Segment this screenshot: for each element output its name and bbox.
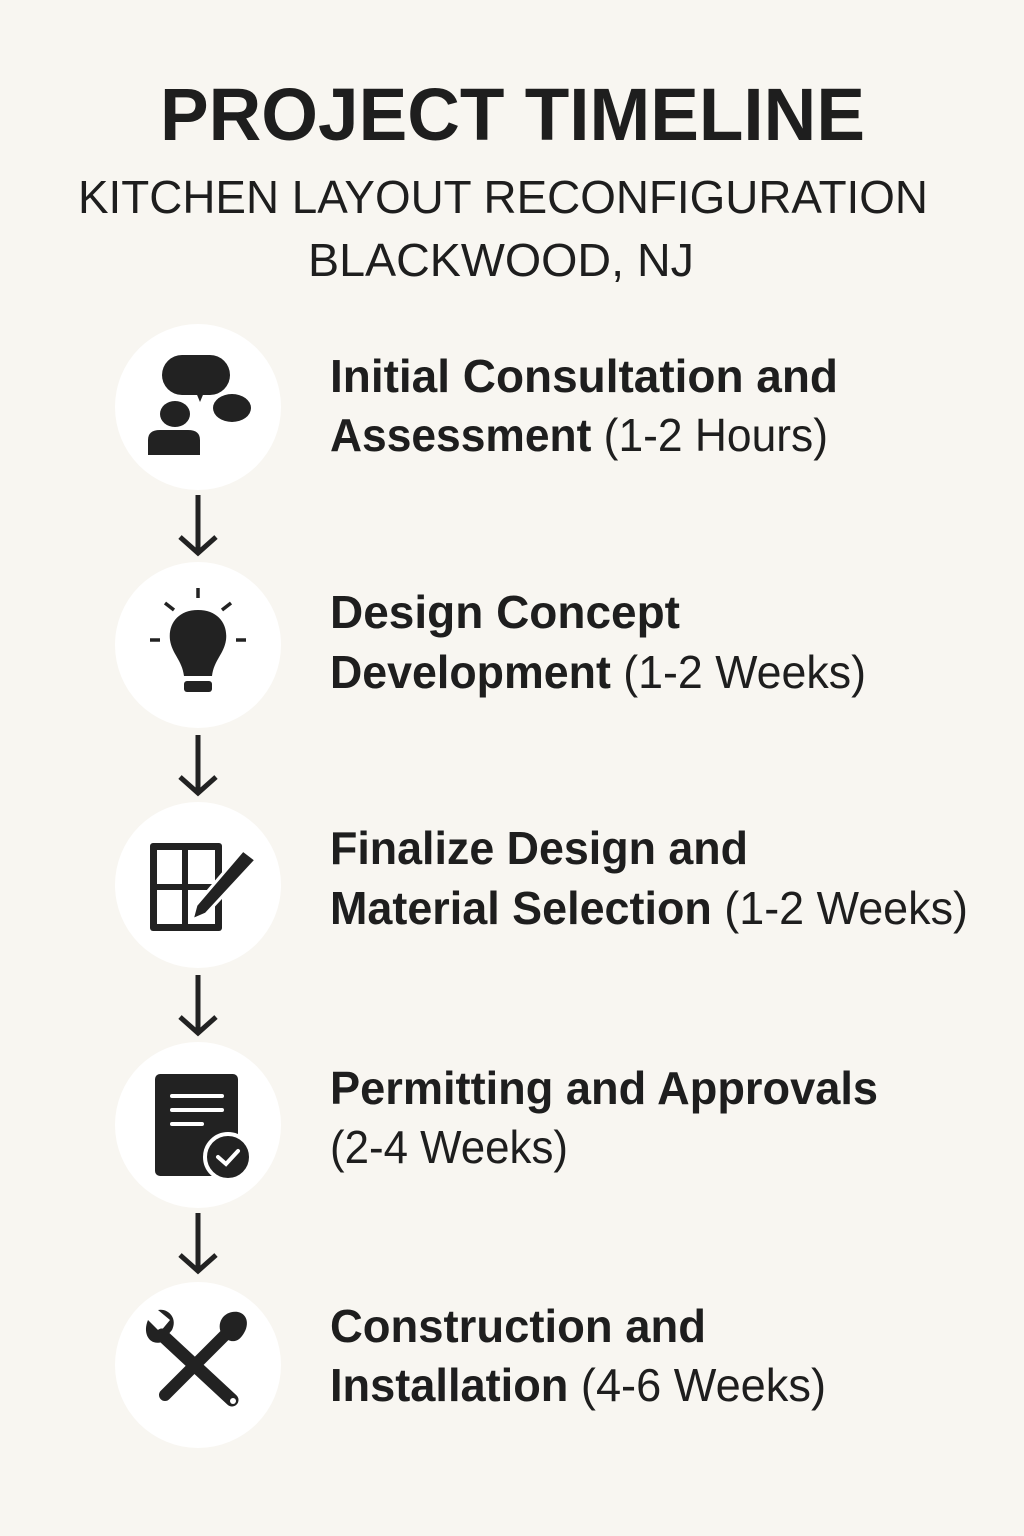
text: step 5	[330, 1300, 826, 1411]
arrow 1	[180, 495, 216, 553]
arrow 2	[180, 735, 216, 793]
icon: wrench and spatula	[115, 1282, 281, 1448]
step 3: finalize design	[115, 802, 968, 968]
arrow 3	[180, 975, 216, 1033]
text: step 5: Installation (4-6 Weeks)	[330, 1359, 826, 1411]
text: step 2	[330, 586, 866, 698]
icon: light bulb	[115, 562, 281, 728]
text: step 1: Initial Consultation and	[330, 350, 838, 402]
icon: grid with pencil	[115, 802, 281, 968]
title: PROJECT TIMELINE	[160, 73, 865, 156]
text: step 2: Development (1-2 Weeks)	[330, 646, 866, 698]
text: step 4: (2-4 Weeks)	[330, 1121, 568, 1173]
text: step 5: Construction and	[330, 1300, 706, 1352]
text: step 4: Permitting and Approvals	[330, 1062, 878, 1114]
text: step 4	[330, 1062, 878, 1173]
text: step 1: Assessment (1-2 Hours)	[330, 409, 828, 461]
text: step 3	[330, 822, 968, 934]
icon: people talking	[115, 324, 281, 490]
subtitle: BLACKWOOD, NJ	[308, 234, 694, 286]
text: step 3: Material Selection (1-2 Weeks)	[330, 882, 968, 934]
text: step 3: Finalize Design and	[330, 822, 748, 874]
subtitle	[78, 171, 928, 286]
step 2: design concept	[115, 562, 866, 728]
subtitle: KITCHEN LAYOUT RECONFIGURATION	[78, 171, 928, 223]
icon: document with check	[115, 1042, 281, 1208]
step 4: permitting	[115, 1042, 878, 1208]
text: step 2: Design Concept	[330, 586, 680, 638]
arrow 4	[180, 1213, 216, 1271]
text: step 1	[330, 350, 838, 461]
step 5: construction	[115, 1282, 826, 1448]
step 1: consultation	[115, 324, 838, 490]
